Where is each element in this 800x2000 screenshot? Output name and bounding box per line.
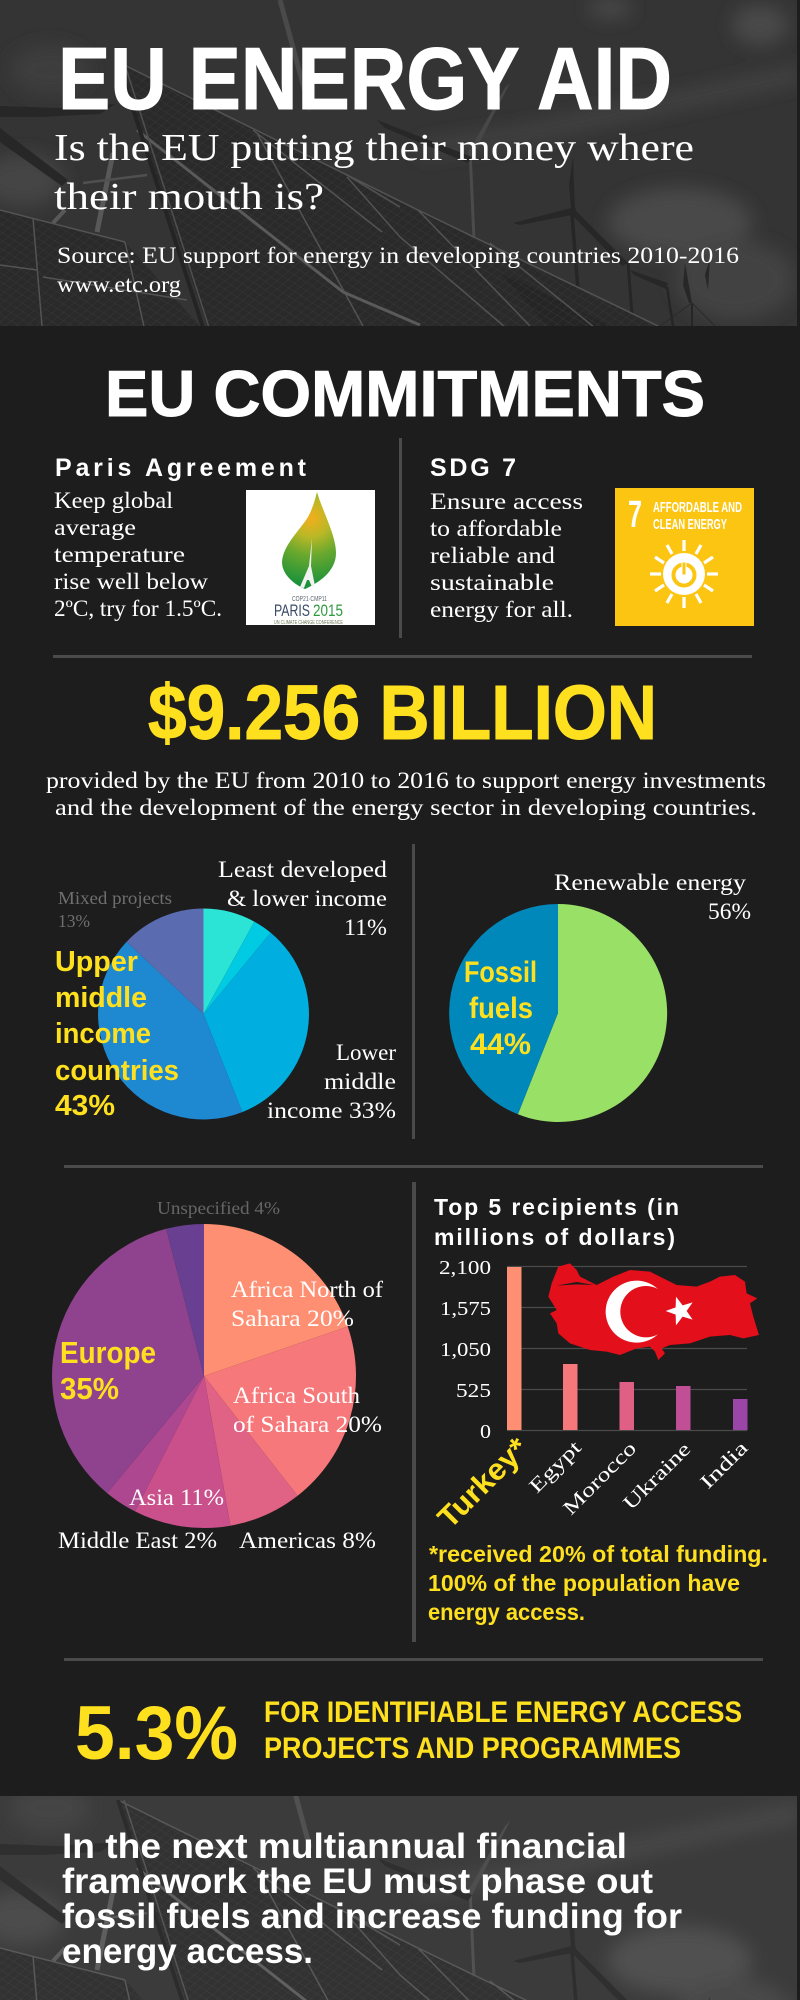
callout: Turkey footnote: *received 20% of total funding. — [429, 1541, 768, 1567]
text block: SDG goal — [430, 489, 583, 622]
source text: Source: EU support for energy in developing countries 2010-2016 — [57, 243, 739, 268]
label: upper middle income: middle — [55, 982, 147, 1014]
text block: SDG goal: reliable and — [430, 543, 556, 568]
text block: Paris goal: 2ºC, try for 1.5ºC. — [54, 596, 222, 621]
call to action text: framework the EU must phase out — [62, 1862, 653, 1901]
callout: Turkey footnote — [428, 1541, 768, 1625]
panel: top 5 recipients — [428, 1194, 768, 1625]
label: Africa South of Sahara — [233, 1383, 382, 1437]
label: Asia: Asia 11% — [129, 1485, 224, 1510]
text block: funding description: and the development of the energy sector in developing countries. — [55, 795, 757, 820]
y axis labels — [439, 1257, 491, 1443]
divider — [53, 655, 752, 658]
pie chart: funding by income group — [55, 857, 396, 1123]
text block: SDG goal: Ensure access — [430, 489, 583, 514]
divider — [64, 1165, 763, 1168]
icon: Paris 2015 logo: UN CLIMATE CHANGE CONFERENCE — [274, 620, 343, 626]
heading: top 5 recipients — [434, 1194, 679, 1250]
text block: SDG goal: energy for all. — [430, 597, 573, 622]
stat: 5.3 percent: 5.3% — [75, 1691, 238, 1776]
y axis labels: 1,050 — [440, 1339, 491, 1361]
panel: SDG 7 — [430, 454, 754, 626]
label: fossil fuels: 44% — [470, 1028, 531, 1061]
icon: SDG 7 tile: 7 — [628, 494, 642, 536]
label: mixed projects: 13% — [58, 911, 90, 931]
icon: Paris 2015 logo: 2015 — [313, 601, 343, 620]
text block: SDG goal: sustainable — [430, 570, 554, 595]
label: Americas: Americas 8% — [239, 1528, 376, 1553]
icon: SDG 7 tile — [615, 488, 754, 626]
x axis labels — [432, 1431, 753, 1535]
label: renewable energy — [554, 870, 751, 924]
divider — [412, 1182, 416, 1642]
icon: SDG 7 tile: CLEAN ENERGY — [653, 516, 727, 533]
x axis labels: Egypt — [525, 1436, 586, 1498]
y axis labels: 0 — [480, 1421, 491, 1443]
divider — [64, 1658, 763, 1661]
label: renewable energy: Renewable energy — [554, 870, 747, 895]
label: mixed projects: Mixed projects — [58, 888, 172, 908]
label: lower middle income: Lower — [336, 1040, 396, 1065]
label: lower middle income: income 33% — [267, 1098, 396, 1123]
subtitle: their mouth is? — [54, 176, 324, 218]
x axis labels: India — [696, 1437, 753, 1494]
label: least developed: Least developed — [218, 857, 388, 882]
call to action text: In the next multiannual financial — [62, 1827, 627, 1866]
label: Middle East: Middle East 2% — [58, 1528, 217, 1553]
label: Africa North of Sahara: Sahara 20% — [231, 1306, 354, 1331]
label: lower middle income: middle — [324, 1069, 396, 1094]
icon: Paris 2015 logo: PARIS — [274, 601, 310, 620]
label: Europe — [60, 1335, 156, 1406]
text block: SDG goal: to affordable — [430, 516, 562, 541]
source text — [57, 243, 739, 297]
y axis labels: 525 — [456, 1380, 491, 1402]
callout: Turkey footnote: energy access. — [428, 1599, 585, 1625]
text block: Paris goal — [54, 488, 222, 621]
header panel — [0, 0, 800, 340]
label: least developed — [218, 857, 388, 940]
x axis labels: Morocco — [559, 1438, 641, 1520]
label: Africa South of Sahara: of Sahara 20% — [233, 1412, 382, 1437]
footer panel — [0, 1796, 797, 2000]
text block: Paris goal: Keep global — [54, 488, 173, 513]
label: Africa North of Sahara: Africa North of — [231, 1277, 383, 1302]
heading: Paris Agreement: Paris Agreement — [55, 454, 307, 482]
label: upper middle income: income — [55, 1018, 151, 1050]
text block: Paris goal: temperature — [54, 542, 185, 567]
label: upper middle income — [55, 946, 179, 1122]
bar chart: recipients — [432, 1257, 759, 1535]
label: least developed: 11% — [344, 915, 387, 940]
text block: energy access projects: FOR IDENTIFIABLE ENERGY ACCESS — [264, 1696, 742, 1729]
label: upper middle income: countries — [55, 1055, 179, 1087]
call to action text: fossil fuels and increase funding for — [62, 1897, 682, 1936]
y axis labels: 2,100 — [439, 1257, 491, 1279]
heading: SDG 7: SDG 7 — [430, 454, 516, 482]
x axis labels: Ukraine — [619, 1438, 695, 1515]
icon: Paris 2015 logo — [246, 490, 375, 626]
label: lower middle income — [267, 1040, 396, 1123]
call to action text — [62, 1827, 682, 1971]
text block: funding description — [46, 768, 766, 820]
label: upper middle income: 43% — [55, 1090, 115, 1122]
heading: EU commitments: EU COMMITMENTS — [105, 357, 705, 430]
subtitle — [54, 134, 692, 210]
heading: top 5 recipients: Top 5 recipients (in — [434, 1194, 679, 1220]
label: Africa South of Sahara: Africa South — [233, 1383, 361, 1408]
label: upper middle income: Upper — [55, 946, 138, 978]
divider — [399, 438, 402, 638]
title: EU ENERGY AID — [58, 29, 672, 128]
label: Europe: Europe — [60, 1335, 156, 1370]
icon: SDG 7 tile: AFFORDABLE AND — [653, 499, 742, 516]
icon: Paris 2015 logo: COP21·CMP11 — [292, 596, 327, 603]
label: unspecified: Unspecified 4% — [157, 1198, 280, 1218]
call to action text: energy access. — [62, 1932, 313, 1971]
text block: Paris goal: average — [54, 515, 136, 540]
pie chart: renewable vs fossil — [449, 870, 751, 1122]
heading: top 5 recipients: millions of dollars) — [434, 1224, 675, 1250]
divider — [412, 844, 415, 1139]
icon: Turkey flag map — [548, 1263, 759, 1360]
y axis labels: 1,575 — [440, 1298, 491, 1320]
label: fossil fuels: fuels — [469, 992, 533, 1025]
source text: www.etc.org — [57, 272, 182, 297]
subtitle: Is the EU putting their money where — [54, 127, 694, 169]
headline figure: $9.256 billion: $9.256 BILLION — [148, 670, 657, 756]
text block: energy access projects — [264, 1696, 742, 1765]
label: mixed projects — [58, 888, 172, 931]
label: Europe: 35% — [60, 1371, 119, 1406]
label: fossil fuels: Fossil — [464, 956, 537, 989]
label: least developed: & lower income — [227, 886, 387, 911]
text block: funding description: provided by the EU from 2010 to 2016 to support energy investments — [46, 768, 766, 793]
pie chart: funding by region — [52, 1198, 383, 1553]
label: renewable energy: 56% — [708, 899, 751, 924]
label: fossil fuels — [464, 956, 537, 1061]
callout: Turkey footnote: 100% of the population have — [428, 1570, 740, 1596]
text block: Paris goal: rise well below — [54, 569, 208, 594]
text block: energy access projects: PROJECTS AND PROGRAMMES — [264, 1732, 681, 1765]
label: Africa North of Sahara — [231, 1277, 383, 1331]
panel: Paris Agreement — [54, 454, 375, 626]
x axis labels: Turkey* — [432, 1431, 535, 1535]
